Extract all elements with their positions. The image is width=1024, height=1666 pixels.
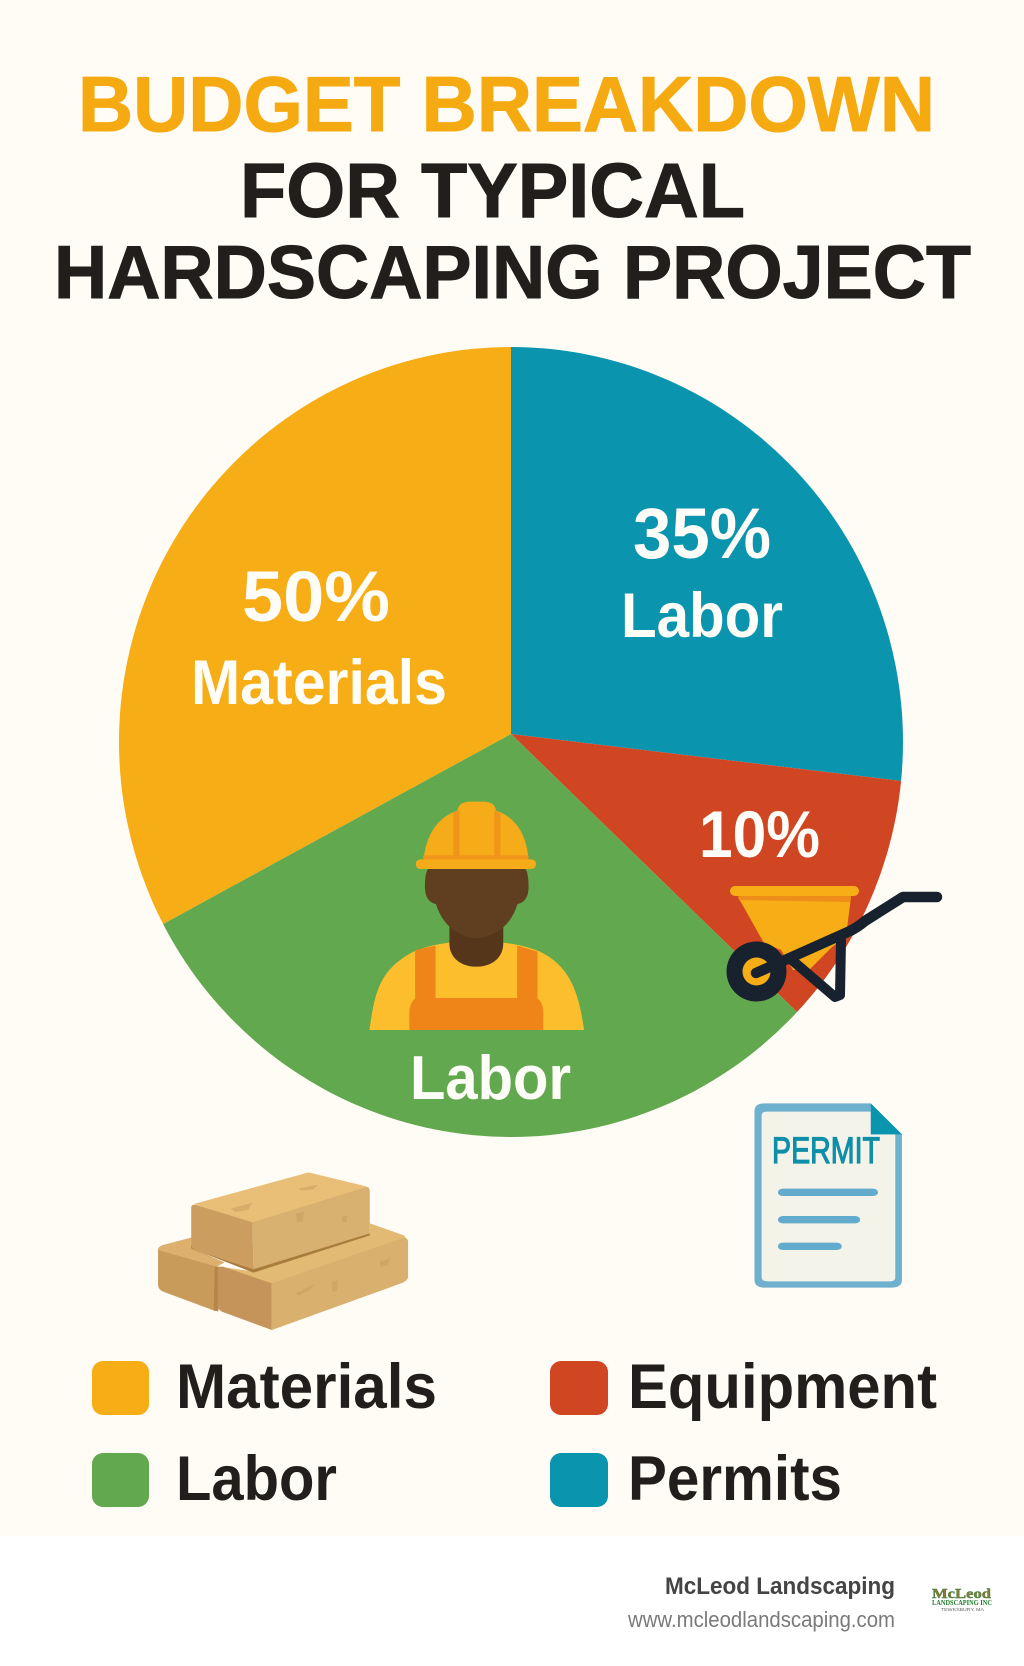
document outline bbox=[754, 1103, 902, 1288]
footer brand text: McLeod Landscaping bbox=[665, 1573, 895, 1600]
gap shadow bbox=[214, 1267, 220, 1311]
label: 35% Labor: Labor bbox=[621, 581, 783, 651]
legend item: materials: Materials bbox=[176, 1352, 437, 1422]
brim bbox=[416, 859, 536, 869]
rim bbox=[730, 886, 859, 896]
title: HARDSCAPING PROJECT bbox=[54, 230, 971, 314]
slice: equipment 10% bbox=[511, 734, 902, 1012]
folded corner bbox=[871, 1103, 902, 1134]
wheel bbox=[726, 942, 786, 1002]
legend bbox=[92, 1352, 937, 1514]
icon: construction worker bbox=[369, 802, 584, 1030]
bottom right brick: front bbox=[218, 1267, 272, 1330]
neck bbox=[449, 920, 503, 967]
handle and frame bbox=[756, 897, 937, 973]
footer logo bbox=[932, 1587, 992, 1612]
footer logo: McLeod bbox=[932, 1587, 991, 1602]
label: 35% Labor bbox=[621, 495, 783, 651]
legend item: permits bbox=[550, 1444, 842, 1514]
title: FOR TYPICAL bbox=[240, 148, 745, 234]
footer brand text bbox=[627, 1573, 895, 1632]
slice: materials 50% bbox=[119, 347, 511, 924]
footer logo: LANDSCAPING INC bbox=[932, 1599, 992, 1607]
footer logo: TEWKSBURY, MA bbox=[941, 1607, 984, 1612]
text lines bbox=[778, 1189, 878, 1196]
bottom right brick: side bbox=[272, 1237, 408, 1330]
paper bbox=[762, 1112, 895, 1281]
bottom left brick bbox=[158, 1237, 224, 1311]
icon: stacked bricks bbox=[158, 1172, 408, 1330]
icon: permit document bbox=[754, 1103, 902, 1288]
title bbox=[54, 60, 971, 314]
footer brand text: www.mcleodlandscaping.com bbox=[627, 1607, 895, 1632]
label: 50% Materials: 50% bbox=[242, 558, 390, 637]
torso bbox=[369, 943, 584, 1030]
overalls bbox=[409, 946, 543, 1030]
speckles bbox=[231, 1185, 390, 1296]
legend item: labor: Labor bbox=[176, 1444, 337, 1514]
legend item: labor bbox=[92, 1444, 337, 1514]
bottom right brick: top face bbox=[219, 1223, 405, 1284]
head bbox=[425, 867, 529, 938]
slice: labor green bbox=[163, 734, 797, 1137]
top brick: left face bbox=[191, 1205, 253, 1269]
label: 50% Materials bbox=[191, 558, 447, 718]
legend item: equipment: Equipment bbox=[628, 1352, 937, 1422]
bucket bbox=[738, 897, 851, 970]
slice: labor 35% bbox=[511, 347, 903, 781]
top brick: right face bbox=[252, 1187, 370, 1269]
permit label: PERMIT bbox=[772, 1130, 880, 1171]
title: BUDGET BREAKDOWN bbox=[78, 60, 935, 148]
helmet bbox=[424, 802, 529, 860]
slices bbox=[119, 347, 903, 1137]
pie chart bbox=[119, 347, 903, 1137]
top brick: top face bbox=[194, 1172, 367, 1222]
label: 50% Materials: Materials bbox=[191, 648, 447, 718]
label: 10%: 10% bbox=[699, 797, 820, 871]
label: 35% Labor: 35% bbox=[633, 495, 771, 574]
icon: wheelbarrow bbox=[726, 886, 937, 1002]
label: Labor: Labor bbox=[410, 1044, 571, 1113]
top brick: shadow bbox=[191, 1233, 370, 1273]
legend item: permits: Permits bbox=[628, 1444, 842, 1514]
